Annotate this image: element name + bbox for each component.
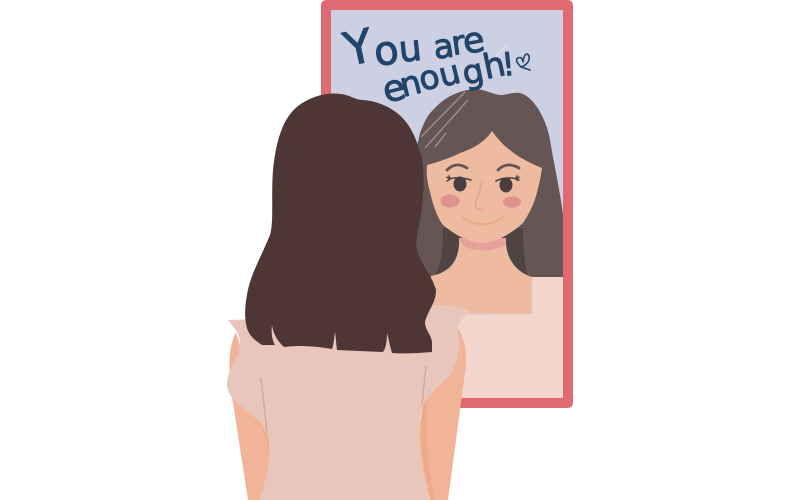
shirt fold lines [261,366,426,433]
reflection: woman in mirror [405,89,563,398]
eyes [454,176,512,192]
text: enough!: u [435,52,464,95]
text: enough!: h [480,44,509,88]
left arm shading [258,423,272,500]
right arm shading [420,397,435,500]
reflection chin shadow [459,238,506,250]
reflection face [427,131,542,243]
text: You are: Y [338,18,379,77]
reflection under hair [436,228,528,276]
mirror glass [331,10,563,398]
eyelashes [447,176,519,181]
hair [245,94,436,353]
eyebrows [447,165,519,170]
panel: mirror [321,0,573,408]
glare lines [421,45,507,148]
text: You are: o [371,27,402,76]
mouth [463,217,503,224]
text: You are: u [397,28,424,71]
mirror frame [321,0,573,408]
reflection neck and chest [431,238,532,314]
text: enough!: n [396,62,425,105]
text: enough!: g [459,50,487,93]
text: You are: a [431,25,456,67]
woman seen from behind [227,94,471,500]
text: You are: r [449,22,468,63]
text: enough!: ! [500,45,517,84]
text: enough!: o [415,56,444,99]
mirror message [338,18,517,112]
blush [440,194,521,208]
left arm [229,332,270,500]
reflection top [440,277,563,398]
text: You are: e [460,20,488,63]
shirt [227,305,471,500]
right arm [420,328,466,500]
icon: heart [517,54,530,70]
nose [475,183,484,210]
text: enough!: e [378,67,410,112]
reflection hair [405,89,563,277]
